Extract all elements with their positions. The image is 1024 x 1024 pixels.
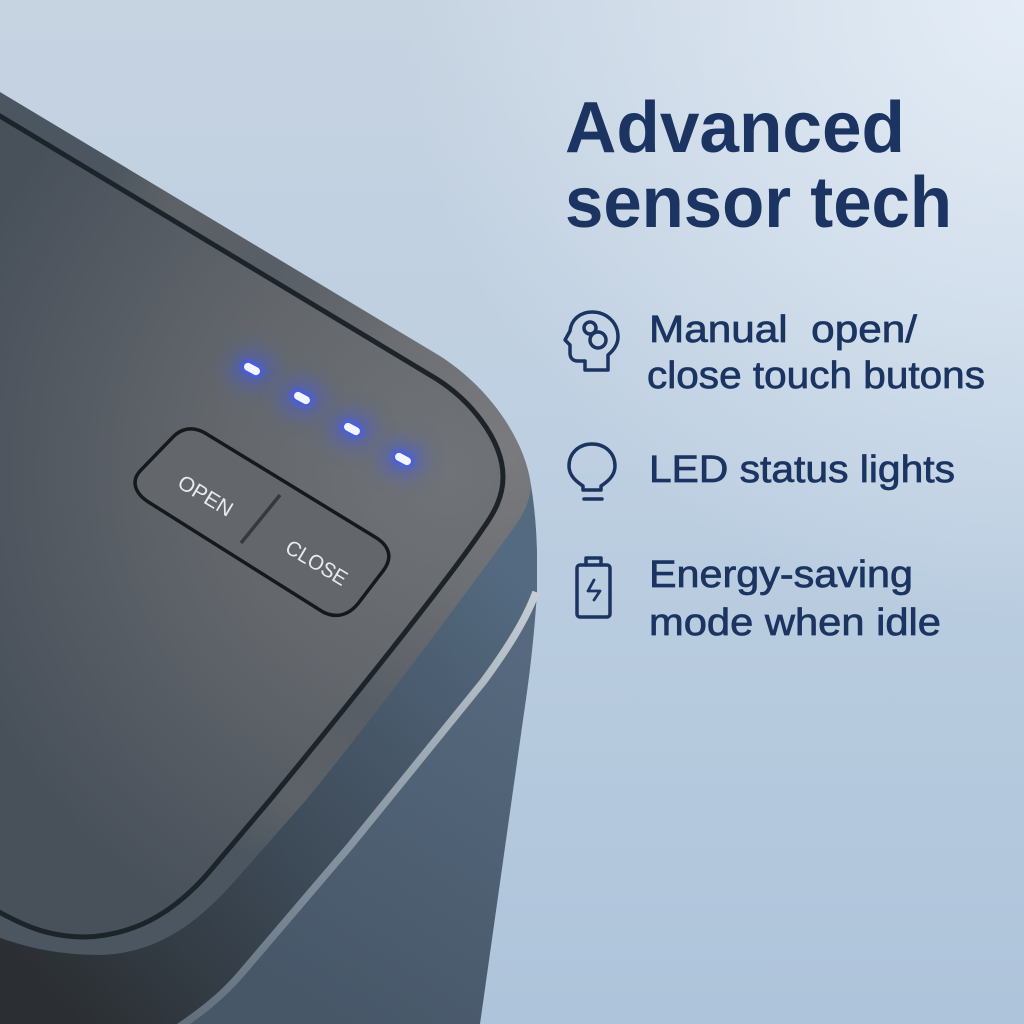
CLOSE label: CLOSE bbox=[281, 536, 351, 591]
feature: manual touch buttons bbox=[565, 309, 985, 397]
text: manual open/close: Manual open/ bbox=[649, 309, 917, 351]
text: energy-saving mode: Energy-saving bbox=[649, 554, 913, 596]
icon: light bulb bbox=[569, 444, 615, 499]
product: smart bin corner bbox=[0, 86, 537, 1024]
LED status lights bbox=[230, 353, 425, 475]
icon: head with gears bbox=[565, 312, 618, 370]
icon: battery bbox=[577, 558, 610, 617]
title bbox=[565, 88, 952, 243]
silver trim strip bbox=[172, 592, 536, 1024]
text: manual open/close: close touch butons bbox=[647, 355, 985, 397]
text: energy-saving mode bbox=[649, 554, 941, 644]
title: sensor tech bbox=[565, 163, 952, 243]
lid top surface with groove bbox=[0, 110, 503, 937]
feature: LED status lights bbox=[569, 444, 955, 499]
feature: energy saving bbox=[577, 554, 941, 644]
lid rim bbox=[0, 86, 531, 955]
text: energy-saving mode: mode when idle bbox=[649, 602, 941, 644]
dark side band under lid bbox=[0, 485, 537, 1024]
text: LED status lights: LED status lights bbox=[649, 449, 955, 491]
open/close touch button panel bbox=[135, 429, 389, 615]
OPEN label: OPEN bbox=[174, 471, 237, 522]
text: manual open/close bbox=[647, 309, 985, 397]
bin body bbox=[0, 470, 537, 1024]
title: Advanced bbox=[565, 88, 905, 168]
